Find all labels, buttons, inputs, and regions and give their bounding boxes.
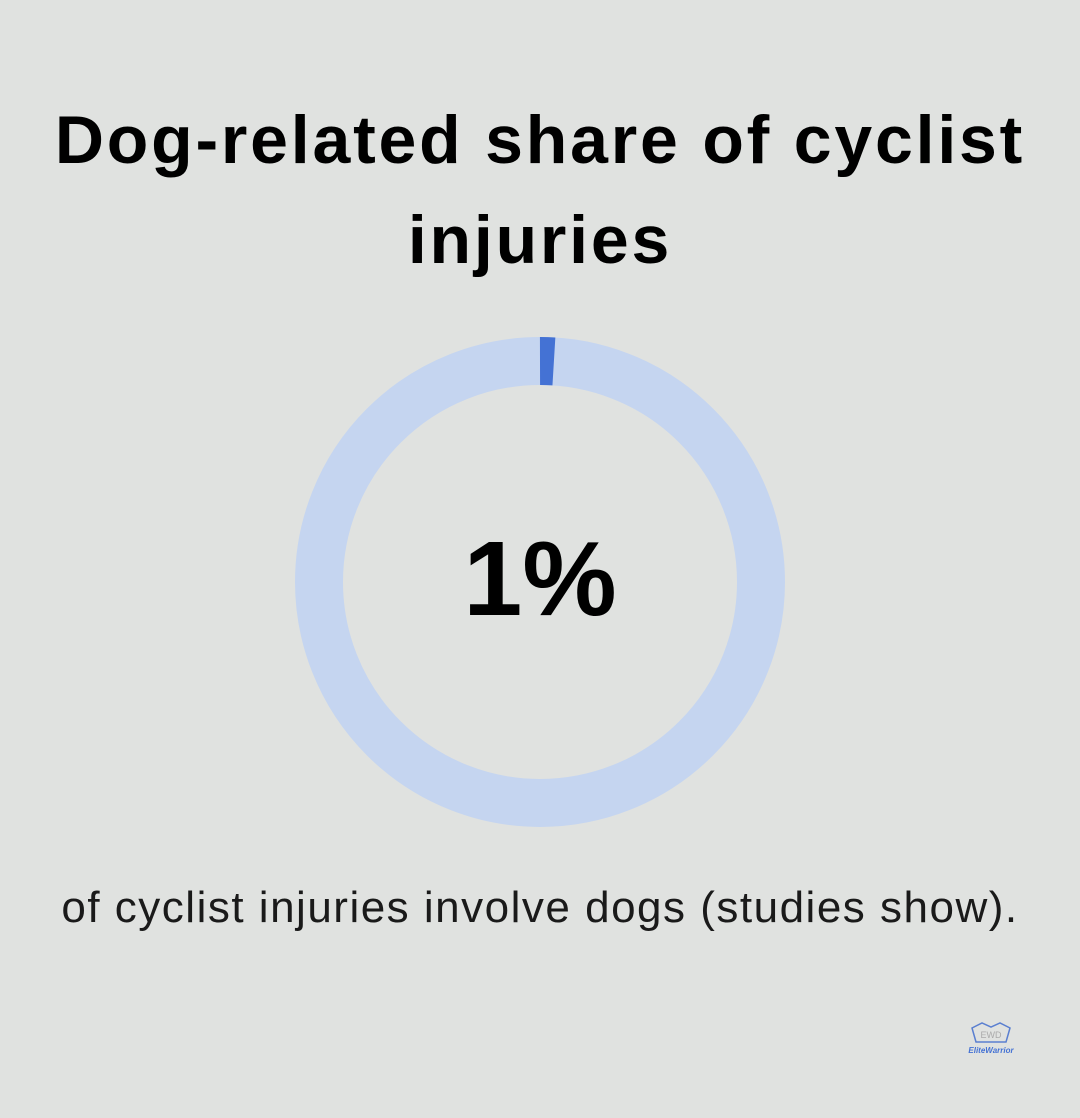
logo [968,1022,1014,1055]
title: Dog-related share of cyclist [55,102,1025,178]
title: injuries [408,202,672,278]
title [55,102,1025,278]
donut chart: 1% [463,520,617,638]
subtitle text: of cyclist injuries involve dogs (studies show). [61,883,1019,932]
logo: EWD [980,1030,1002,1040]
logo: EliteWarrior [968,1046,1014,1055]
